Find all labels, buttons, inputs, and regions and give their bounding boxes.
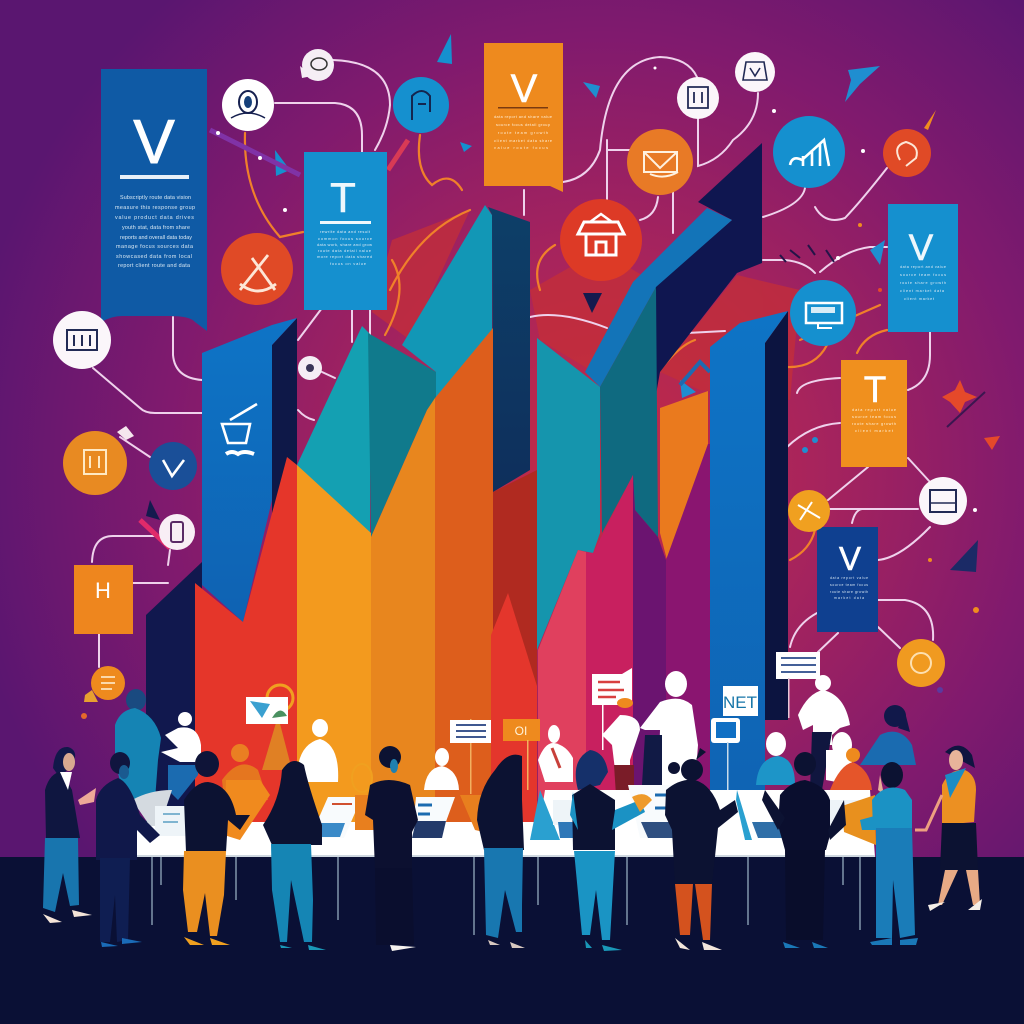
white figure center [424,748,459,790]
panel: light blue V right [888,204,958,332]
orange right panel [660,391,708,560]
background crowd and signs [115,652,916,802]
panel: large blue V [101,69,207,331]
red background patches [372,210,800,400]
red peak [195,457,297,840]
blue right bar [710,311,788,840]
panel: orange V top: route team growth [498,131,548,135]
panel: large blue V: reports and overall data today [120,235,192,241]
panel: large blue V: Subscriptly route data vision [120,195,191,201]
magenta face [586,475,633,840]
chart: front layer of coloured peaks [195,328,710,840]
white figure with orange hair [602,698,640,795]
panel: orange V top: data report and share value [494,115,552,119]
white figure seated [161,712,201,800]
panel: orange T right: client market [855,429,894,433]
man blue shirt folded [860,762,918,945]
icon: speech bubble [300,49,334,81]
laptop 3 [412,797,455,838]
icon: blue monitor [790,280,856,346]
NET sign: NET [723,693,757,712]
blue screen sign [711,718,740,802]
panel: navy V right: data report value [830,576,868,580]
teal peak [297,326,370,537]
panel: orange V top: client market data share [494,139,552,143]
icon: bar growth circle [773,116,845,188]
panel: light blue T [304,152,387,310]
teal peak shaded face [368,333,436,537]
table with laptops [132,780,876,935]
icon: small white node [298,356,322,380]
man left, navy suit [96,752,160,947]
laptop 4 [530,790,577,840]
panel: orange T right: data report value [852,408,896,412]
panel: large blue V: V [133,108,175,177]
panel: large blue V: report client route and data [118,263,190,269]
panel: light blue V right: source team focus [900,273,946,277]
icon: white right card [919,477,967,525]
woman orange top right [915,746,982,911]
icon: navy check [149,442,197,490]
woman teal trousers [263,761,326,950]
woman teal top [570,750,652,951]
icon: small white pack [735,52,775,92]
icon: person white circle [222,79,274,131]
connector lines [92,57,933,667]
table edge [135,855,875,857]
panel: light blue V right: route share growth [900,281,946,285]
panel: orange V top: V [511,67,538,111]
panel: light blue V right: V [909,227,934,268]
red small peak [491,593,537,840]
laptop 6 [736,790,860,840]
teal right peak [537,338,600,650]
icon: house circle [560,199,642,281]
icon: small white pill [159,514,195,550]
dark red face [493,470,537,700]
panel: large blue V: youth stat, data from share [122,225,190,231]
panel: orange T right [841,360,907,467]
panel: navy V right: route share growth [830,590,868,594]
panel: navy V right: source team focus [830,583,868,587]
tall white figure [640,671,698,785]
panel: orange small left: H [95,578,111,603]
panel: orange V top: source focus detail group [496,123,550,127]
panel: navy V right: V [839,540,861,577]
panel: orange T right: source team focus [852,415,896,419]
chart: back layer of 3D peaks [146,143,788,860]
blue left bar [202,318,297,622]
orange sign [503,719,540,790]
teal right peak second face [600,287,658,537]
panel: orange T right: route share growth [852,422,896,426]
panel: light blue V right: client market [904,297,935,301]
laptop 2 [310,797,362,838]
panel: orange T right: T [864,369,886,410]
panel: large blue V: value product data drives [115,215,194,221]
woman blue trousers centre [477,755,525,948]
left dish [132,790,172,826]
icon: orange lower right [897,639,945,687]
red seated person [830,748,872,790]
confetti fragments [81,34,1000,719]
icon: shopping basket on left bar [222,404,257,454]
panel: navy V right [817,527,878,632]
icon: document white [677,77,719,119]
man in blue, standing [115,689,161,800]
orange face two [371,398,435,840]
panel: light blue T: route data detail value [318,248,372,253]
foreground people [43,746,982,951]
folder orange [842,795,876,845]
NET sign [723,686,758,716]
panel: large blue V: manage focus sources data [116,244,193,250]
woman left, dark jacket [43,747,96,923]
man black with white shoes [365,746,418,951]
white small figure [538,725,573,782]
laptop 1 [155,806,190,836]
panel: light blue T: rewrite data and result [320,229,371,234]
orange seated [222,744,268,800]
list sign right [776,652,820,718]
panel: light blue T: common focus source [318,236,373,241]
panel: light blue T: focus on value [330,261,367,266]
icon circles [53,49,967,702]
panel: orange small left [74,565,133,634]
man dark with blue shoes [762,752,846,948]
orange platform [224,780,270,840]
picture sign [246,685,293,770]
icon: blue head circle [393,77,449,133]
panel: light blue T: T [330,174,356,221]
panel: light blue V right: data report and value [900,265,946,269]
icon: orange right [788,490,830,532]
tall peak dark face [488,207,530,492]
speech bubble sign [592,668,632,750]
panel: navy V right: market data [834,596,864,600]
orange block center [355,795,497,835]
icon: orange left [63,431,127,495]
icon: red round [883,129,931,177]
panel: orange V top: value route focus [494,146,548,150]
big arrow [655,143,762,400]
blue woman back [860,705,916,765]
purple face [666,444,710,840]
icon: white left grid [53,311,111,369]
white figure center left [297,719,338,782]
blue line sign [450,719,491,794]
woman orange trousers [183,751,250,945]
panel: light blue V right: client market data [900,289,945,293]
pink face [538,550,586,840]
panel: large blue V: measure this response group [115,205,195,211]
orange sign: OI [515,724,527,738]
teal seated person [756,732,795,785]
tall teal peak [402,205,492,400]
orange face three [435,328,493,840]
icon: screen circle [627,129,693,195]
orange face one [297,465,371,840]
dark side of left bar [272,318,297,530]
panel: light blue T: data work, share and grow [317,242,372,247]
panel: light blue T: more report data shared [317,254,372,259]
white standing figure right [798,675,850,790]
white seated figure right [826,732,852,785]
small orange person [352,764,372,792]
panel: orange V top [484,43,563,192]
panel: large blue V: showcased data from local [116,254,192,260]
arrow lit face [585,208,732,387]
dark navy left bar [146,562,202,860]
icon: orange lower left tag [84,666,125,702]
dark side of right bar [765,311,788,720]
icon: tools circle [221,233,293,305]
floor [0,857,1024,1024]
laptop 5 [628,785,678,838]
dark purple face [633,475,666,840]
woman black dress [665,748,738,950]
